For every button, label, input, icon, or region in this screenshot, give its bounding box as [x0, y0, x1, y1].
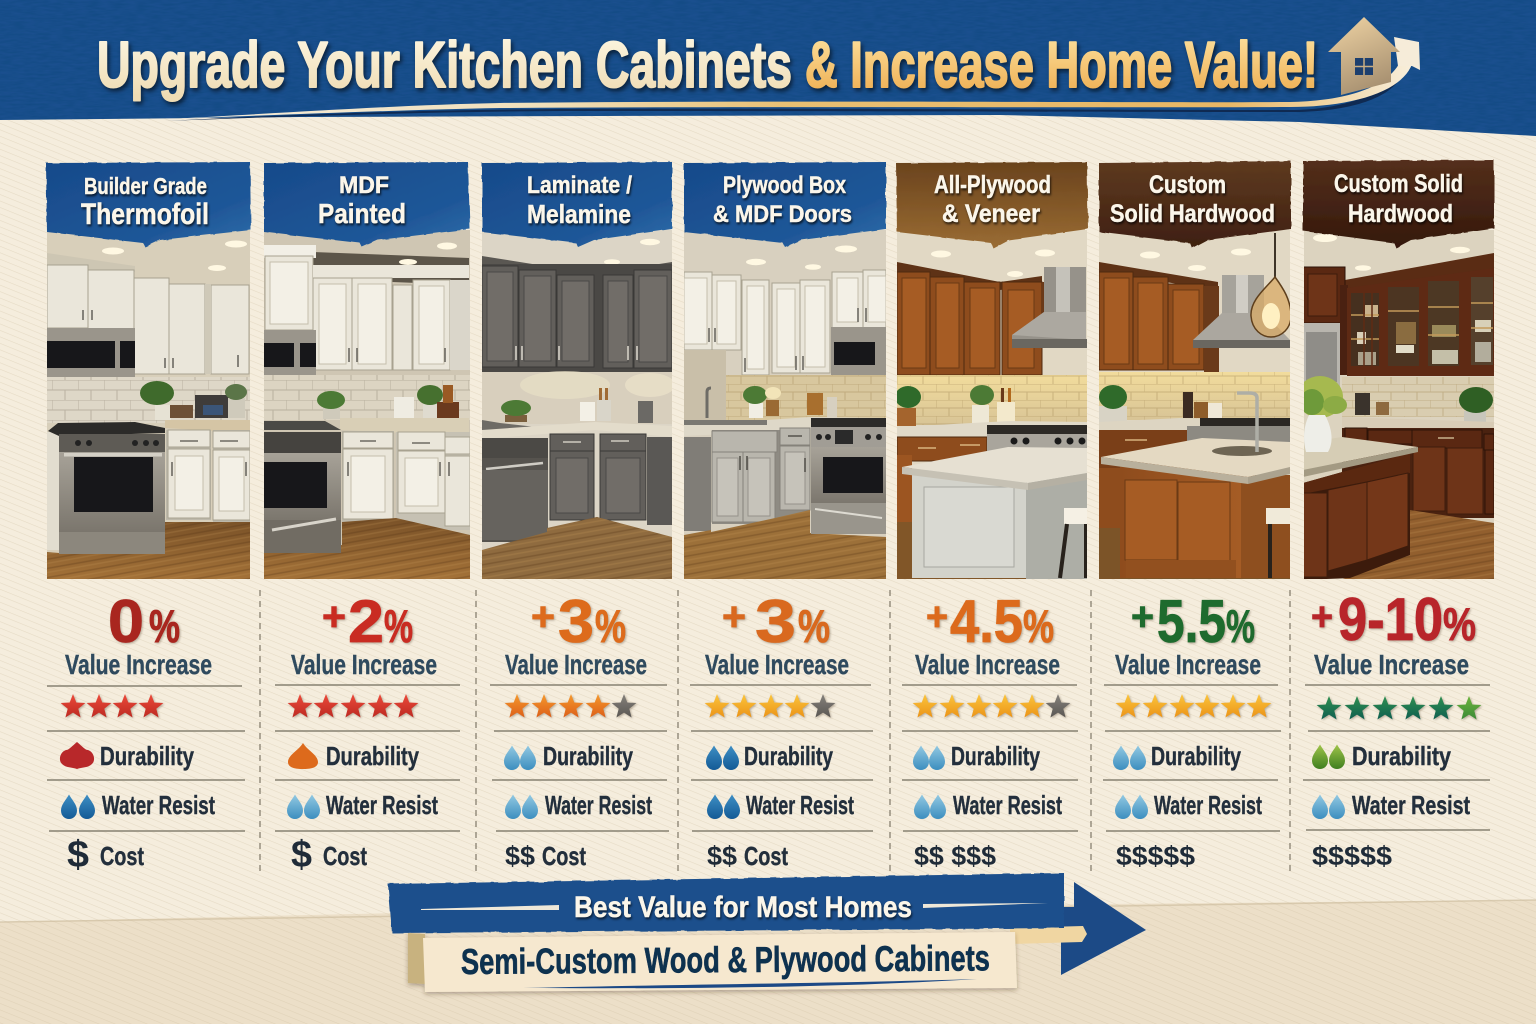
ribbon text: All-Plywood	[934, 171, 1051, 199]
rating stars: 6 gold	[1116, 694, 1271, 718]
ribbon text: Custom	[1149, 171, 1226, 199]
cost row	[707, 841, 788, 871]
divider lines	[1103, 685, 1281, 831]
divider lines	[1303, 685, 1490, 830]
ribbon text: Hardwood	[1348, 200, 1453, 228]
value: 0%: 0	[108, 588, 144, 655]
divider lines	[902, 685, 1078, 831]
banner rules	[421, 903, 1048, 910]
durability row: Durability	[1151, 741, 1241, 771]
cost row: $	[291, 834, 312, 876]
durability row	[60, 741, 194, 771]
label: value increase: Value Increase	[1314, 649, 1469, 680]
panel: Plywood Box & MDF Doors	[684, 162, 886, 580]
stats column 4	[690, 588, 873, 871]
ribbon text: Custom Solid	[1334, 170, 1463, 198]
ribbon text	[527, 172, 632, 229]
durability row: Durability	[1352, 741, 1451, 771]
divider lines	[275, 685, 460, 831]
durability row	[706, 741, 833, 771]
water resist row	[287, 790, 438, 820]
durability row	[504, 741, 633, 771]
cost row: Cost	[542, 841, 586, 871]
cost row	[505, 841, 586, 871]
ribbon text: & Veneer	[942, 200, 1040, 228]
kitchen photo 6	[1099, 230, 1291, 580]
value: +3%: 3	[558, 588, 594, 655]
ribbon text	[1110, 171, 1275, 228]
stats column 1	[47, 588, 245, 876]
ribbon text	[713, 172, 852, 228]
value: +2%: +	[322, 595, 346, 639]
cost row: Cost	[744, 841, 788, 871]
durability row: Durability	[951, 741, 1040, 771]
kitchen photo 3	[482, 230, 675, 580]
kitchen photo 2	[264, 230, 470, 580]
durability row	[1113, 741, 1241, 771]
value: +5.5%: 5.5	[1157, 588, 1226, 655]
durability row	[1312, 741, 1451, 771]
title underline swoosh with arrow	[165, 37, 1420, 121]
ribbon text: Builder Grade	[84, 173, 207, 199]
water resist row: Water Resist	[545, 790, 652, 820]
value: +4.5%: +	[926, 595, 948, 639]
header ribbon 4	[684, 162, 886, 247]
cost: $$ $$$	[914, 841, 996, 871]
panel: All-Plywood & Veneer	[895, 162, 1088, 580]
divider lines	[47, 686, 245, 831]
cream plaque	[408, 932, 1017, 992]
cost row: $$	[707, 841, 737, 871]
value: +3%: 3	[755, 588, 796, 655]
header band	[0, 0, 1536, 140]
kitchen photo 5	[895, 230, 1088, 580]
panel: Custom Solid Hardwood premium	[1297, 160, 1494, 580]
value: 0%: %	[149, 600, 180, 652]
cost row: $	[67, 834, 89, 876]
rating stars: 5 red	[288, 694, 418, 718]
water resist row	[61, 790, 215, 820]
ribbon text: Melamine	[527, 199, 631, 229]
durability row: Durability	[744, 741, 833, 771]
panel: Laminate / Melamine	[482, 162, 675, 580]
rating stars: 4 red	[61, 694, 163, 718]
label: value increase: Value Increase	[65, 649, 212, 680]
label: value increase: Value Increase	[505, 649, 647, 680]
banner shaft	[388, 873, 1064, 933]
stats column 6	[1103, 588, 1281, 871]
label: value increase: Value Increase	[291, 649, 437, 680]
water resist row: Water Resist	[1352, 790, 1470, 820]
durability row: Durability	[326, 741, 419, 771]
kitchen photo 1	[47, 230, 250, 580]
label: value increase: Value Increase	[915, 649, 1060, 680]
water resist row	[1115, 790, 1262, 820]
value: +9-10%: +	[1311, 595, 1333, 639]
value: +3%: +	[531, 595, 555, 639]
rating stars: 5 gold 1 grey	[913, 694, 1070, 718]
header ribbon 3	[482, 162, 672, 247]
ribbon text: & MDF Doors	[713, 201, 852, 228]
header ribbon 1	[46, 162, 251, 247]
value: +9-10%: %	[1443, 598, 1476, 650]
ribbon text	[318, 172, 406, 229]
water resist row: Water Resist	[1154, 790, 1262, 820]
durability row	[288, 741, 419, 771]
cost row	[291, 834, 367, 876]
gold arrow strip	[1010, 926, 1087, 944]
stats column 2	[275, 588, 460, 876]
label: value increase: Value Increase	[705, 649, 849, 680]
divider lines	[690, 685, 873, 831]
durability row	[913, 741, 1040, 771]
value: +2%	[322, 588, 413, 655]
panel: Builder Grade Thermofoil	[46, 162, 251, 580]
value: +3%: +	[722, 595, 746, 639]
kitchen photo 4	[684, 230, 886, 580]
water resist row	[505, 790, 652, 820]
water resist row: Water Resist	[326, 790, 438, 820]
value: +4.5%	[926, 588, 1054, 655]
divider lines	[490, 685, 669, 831]
panel: MDF Painted	[264, 162, 470, 580]
ribbon text	[934, 171, 1051, 228]
ribbon text	[1334, 170, 1463, 228]
water resist row	[914, 790, 1062, 820]
kitchen photo 7	[1297, 230, 1494, 580]
cost row: $$	[505, 841, 535, 871]
arrow head	[1061, 882, 1146, 975]
stats column 5	[902, 588, 1078, 871]
rating stars: 4 gold 1 grey	[705, 694, 835, 718]
cost: $$$$$	[1312, 841, 1392, 871]
water resist row: Water Resist	[102, 790, 215, 820]
cost row	[67, 834, 144, 876]
value: +5.5%: %	[1226, 600, 1255, 652]
ribbon text	[81, 173, 209, 231]
value: +3%	[531, 588, 626, 655]
ribbon text: Thermofoil	[81, 198, 209, 231]
value: +9-10%: 9-10	[1338, 586, 1443, 653]
value: +3%	[722, 588, 830, 655]
value: +4.5%: 4.5	[950, 588, 1023, 655]
header ribbon 6	[1099, 161, 1291, 248]
cost row: Cost	[100, 841, 144, 871]
water resist row: Water Resist	[953, 790, 1062, 820]
water resist row	[1312, 790, 1470, 820]
title: Upgrade Your Kitchen Cabinets	[97, 28, 792, 101]
plaque text: Semi-Custom Wood & Plywood Cabinets	[461, 937, 990, 982]
value: +4.5%: %	[1023, 600, 1054, 652]
durability row: Durability	[100, 741, 194, 771]
value: +2%: %	[384, 600, 413, 652]
bottom arrow banner	[388, 873, 1146, 992]
value: 0%	[108, 588, 180, 655]
header ribbon 2	[264, 162, 470, 247]
stats column 3	[490, 588, 669, 871]
rating stars: 4 orange 1 grey	[505, 694, 636, 718]
ribbon text: Laminate /	[527, 172, 632, 199]
stats column 7	[1303, 586, 1490, 871]
icon: house	[1328, 17, 1400, 95]
header ribbon 5	[896, 162, 1088, 248]
ribbon text: Painted	[318, 198, 406, 229]
durability row: Durability	[543, 741, 633, 771]
cost: $$$$$	[1116, 841, 1195, 871]
title: & Increase Home Value!	[805, 28, 1318, 101]
column separators	[260, 590, 1290, 872]
header ribbon 7	[1303, 160, 1494, 248]
ribbon text: Solid Hardwood	[1110, 200, 1275, 228]
rating stars: 6 green	[1317, 696, 1481, 720]
value: +3%: %	[798, 600, 830, 652]
value: +3%: %	[595, 600, 626, 652]
value: +5.5%: +	[1131, 595, 1154, 639]
panel: Custom Solid Hardwood	[1099, 161, 1291, 580]
value: +5.5%	[1131, 588, 1255, 655]
label: value increase: Value Increase	[1115, 649, 1261, 680]
banner heading: Best Value for Most Homes	[574, 891, 912, 924]
ribbon text: Plywood Box	[723, 172, 847, 199]
value: +2%: 2	[348, 588, 384, 655]
water resist row: Water Resist	[746, 790, 854, 820]
ribbon text: MDF	[339, 172, 389, 199]
cost row: Cost	[323, 841, 367, 871]
water resist row	[707, 790, 854, 820]
